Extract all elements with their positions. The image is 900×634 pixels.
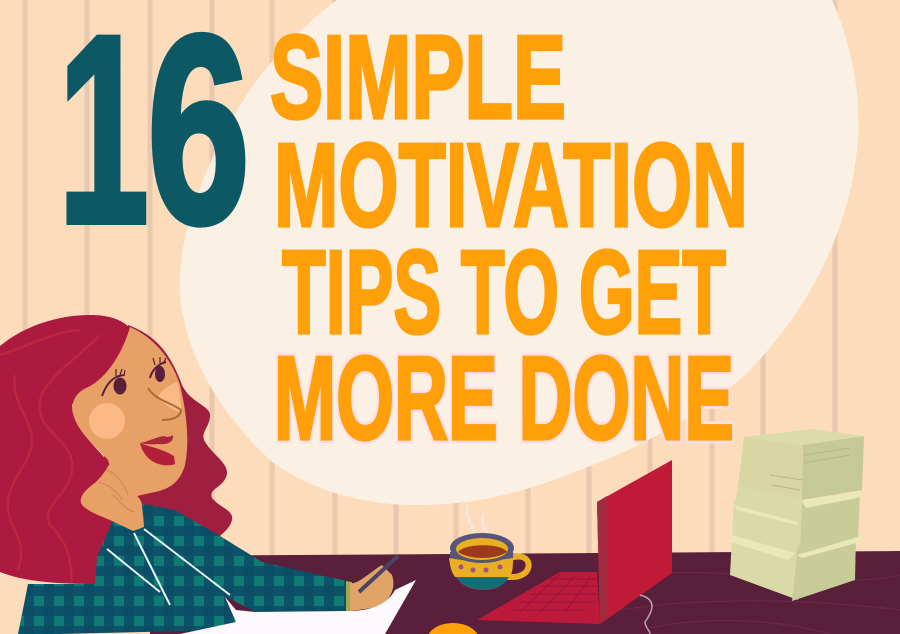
speech bubble blob (180, 0, 858, 505)
orange fruit on desk (427, 623, 479, 634)
hand holding pencil (350, 565, 393, 611)
nose (148, 388, 181, 420)
hair strands (0, 330, 100, 582)
cuff (346, 581, 352, 611)
screen (597, 460, 672, 624)
cable (640, 595, 652, 634)
shirt (18, 504, 347, 634)
cheeks (89, 382, 182, 439)
cup handle (506, 556, 529, 577)
hoodie strings (107, 529, 230, 605)
desk (150, 551, 900, 634)
hair back (100, 325, 232, 560)
pencil (359, 556, 398, 592)
mouth (140, 435, 175, 465)
keyboard base (477, 572, 600, 624)
laptop (477, 460, 672, 634)
face (72, 327, 187, 500)
woman (0, 315, 398, 634)
title text (270, 11, 748, 465)
paper on desk (180, 580, 416, 634)
cup body (450, 552, 513, 590)
coffee cup (449, 505, 529, 590)
paper flaps (730, 491, 868, 560)
hair front (0, 315, 130, 584)
paper stack (730, 429, 868, 601)
steam (467, 505, 489, 546)
hand on chin (81, 463, 144, 531)
eyes (102, 357, 166, 396)
title text: SIMPLE (270, 11, 566, 144)
